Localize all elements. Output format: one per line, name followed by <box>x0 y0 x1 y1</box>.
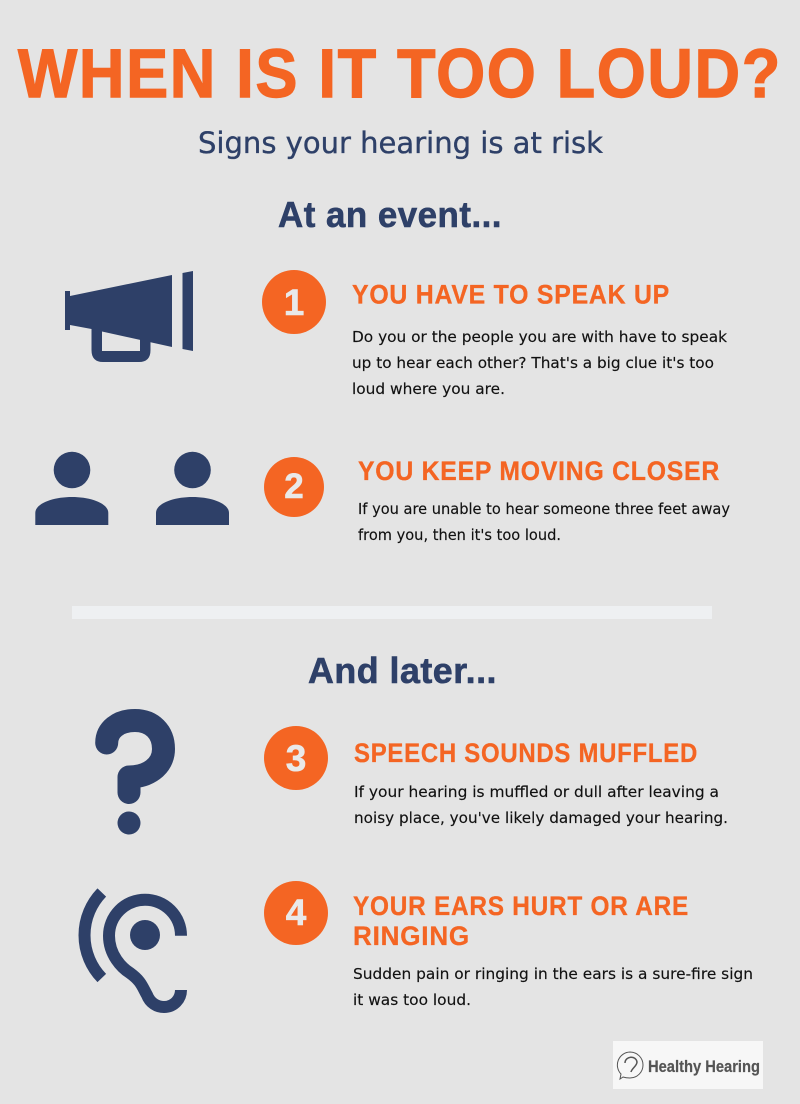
step 1 text: loud where you are. <box>352 380 505 398</box>
step 4 text <box>353 891 753 1009</box>
step 1 badge: 1 <box>284 282 304 323</box>
step 4 text: Sudden pain or ringing in the ears is a sure-fire sign <box>353 965 753 983</box>
heading: and later: And later... <box>308 650 497 691</box>
step 2 text: If you are unable to hear someone three feet away <box>358 500 730 518</box>
step 2 badge <box>264 457 324 517</box>
step 1 text: up to hear each other? That's a big clue it's too <box>352 354 714 372</box>
step 4 badge: 4 <box>286 892 307 933</box>
step 2 badge: 2 <box>284 467 304 506</box>
step 3 text: If your hearing is muffled or dull after leaving a <box>354 783 719 801</box>
icon: ear <box>85 892 181 1007</box>
step 2 text <box>358 456 730 544</box>
step 1 text <box>352 280 727 398</box>
subtitle: Signs your hearing is at risk <box>198 126 603 160</box>
step 3 badge: 3 <box>286 738 306 779</box>
heading: at an event: At an event... <box>278 194 502 235</box>
step 4 text: RINGING <box>353 921 470 951</box>
step 3 text: SPEECH SOUNDS MUFFLED <box>354 738 698 768</box>
step 3 text: noisy place, you've likely damaged your hearing. <box>354 809 728 827</box>
icon: megaphone <box>65 271 193 362</box>
logo: healthy hearing: Healthy Hearing <box>648 1057 760 1076</box>
step 2 text: from you, then it's too loud. <box>358 526 561 544</box>
step 1 text: Do you or the people you are with have to speak <box>352 328 727 346</box>
logo: healthy hearing <box>613 1041 763 1089</box>
step 3 text <box>354 738 728 827</box>
step 4 text: YOUR EARS HURT OR ARE <box>353 891 689 921</box>
step 1 badge <box>262 270 326 334</box>
icon: two people <box>35 452 229 525</box>
icon: question mark <box>107 720 164 834</box>
step 3 badge <box>264 726 328 790</box>
step 4 text: it was too loud. <box>353 991 471 1009</box>
step 2 text: YOU KEEP MOVING CLOSER <box>358 456 720 486</box>
step 1 text: YOU HAVE TO SPEAK UP <box>352 280 670 310</box>
step 4 badge <box>264 881 328 945</box>
